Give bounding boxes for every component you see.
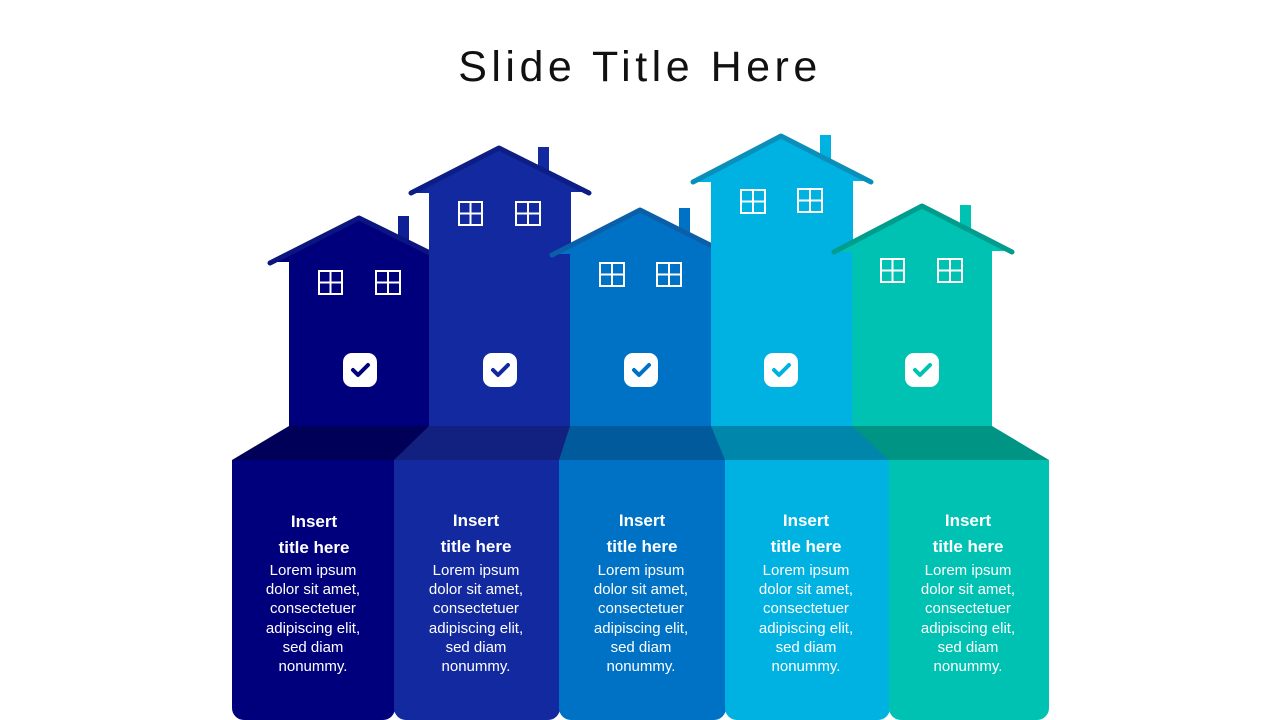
panel 1 text: adipiscing elit,	[266, 620, 360, 637]
panel 2 text: Insert	[453, 511, 499, 530]
panel 4 text: dolor sit amet,	[759, 581, 853, 598]
house 5	[834, 205, 1012, 426]
panel 1 text	[266, 512, 360, 675]
panel 2 text: adipiscing elit,	[429, 620, 523, 637]
panel 2 text: dolor sit amet,	[429, 581, 523, 598]
panel 1 text: consectetuer	[270, 600, 356, 617]
panel 3 text: dolor sit amet,	[594, 581, 688, 598]
panel 4	[693, 135, 890, 720]
panel 2	[394, 147, 589, 720]
panel 1 text: nonummy.	[279, 658, 347, 675]
panel 5 text: adipiscing elit,	[921, 620, 1015, 637]
house 3	[552, 208, 730, 426]
panel 4 text: nonummy.	[772, 658, 840, 675]
panel 5 text	[921, 511, 1015, 675]
panel 3 text: Insert	[619, 511, 665, 530]
panel 2 text	[429, 511, 523, 675]
panel 4 text: consectetuer	[763, 600, 849, 617]
panel 2 text: nonummy.	[442, 658, 510, 675]
panel 5 text: consectetuer	[925, 600, 1011, 617]
panel 5	[834, 205, 1049, 720]
panel 1 text: sed diam	[283, 639, 343, 656]
panel 4 text: Lorem ipsum	[763, 562, 849, 579]
panel 3 text: Lorem ipsum	[598, 562, 684, 579]
panel 2 text: title here	[441, 537, 511, 556]
panel 1 text: title here	[279, 538, 349, 557]
panel 4 text: sed diam	[776, 639, 836, 656]
house 2	[411, 147, 589, 426]
panel 5 text: dolor sit amet,	[921, 581, 1015, 598]
panel 1	[232, 216, 431, 720]
panel 3 text: consectetuer	[598, 600, 684, 617]
house 4	[693, 135, 871, 426]
panel 3 text: title here	[607, 537, 677, 556]
panel 1 text: dolor sit amet,	[266, 581, 360, 598]
panel 3	[552, 208, 730, 720]
panel 4 text: title here	[771, 537, 841, 556]
title: Slide Title Here	[458, 43, 822, 91]
panel 3 text	[594, 511, 688, 675]
panel 4 text	[759, 511, 853, 675]
panel 5 text: Insert	[945, 511, 991, 530]
panel 2 text: sed diam	[446, 639, 506, 656]
house 1	[270, 216, 431, 426]
panel 5 text: nonummy.	[934, 658, 1002, 675]
panel 3 text: nonummy.	[607, 658, 675, 675]
panel 4 text: adipiscing elit,	[759, 620, 853, 637]
panel 3 text: adipiscing elit,	[594, 620, 688, 637]
panel 2 text: consectetuer	[433, 600, 519, 617]
panel 1 text: Lorem ipsum	[270, 562, 356, 579]
panel 1 text: Insert	[291, 512, 337, 531]
panel 5 text: Lorem ipsum	[925, 562, 1011, 579]
panel 4 text: Insert	[783, 511, 829, 530]
panel 2 text: Lorem ipsum	[433, 562, 519, 579]
panel 5 text: title here	[933, 537, 1003, 556]
panel 5 text: sed diam	[938, 639, 998, 656]
panel 3 text: sed diam	[611, 639, 671, 656]
